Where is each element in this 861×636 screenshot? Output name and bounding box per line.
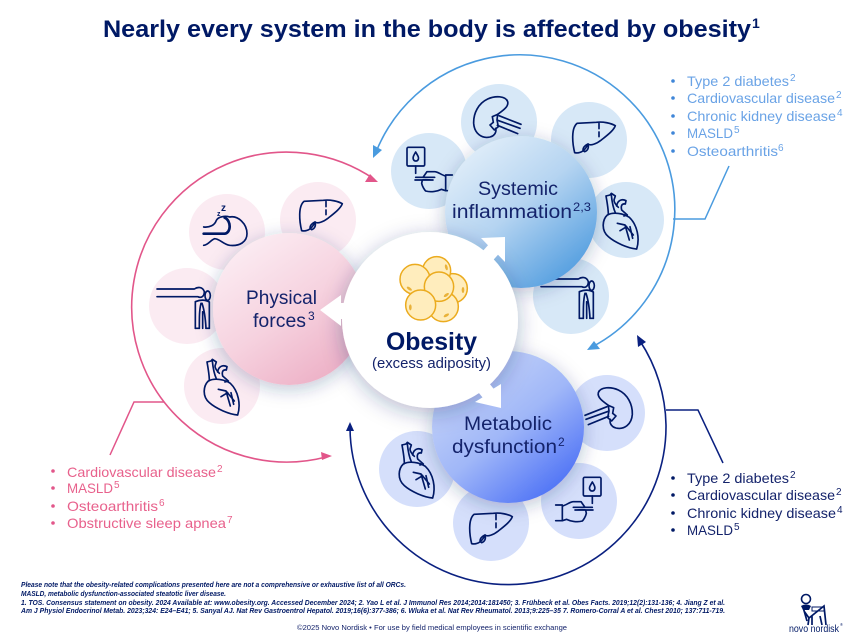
icon: blood test on blue <box>391 133 467 209</box>
label: physical forces: forces <box>253 311 306 332</box>
label: obesity: Obesity <box>386 328 477 356</box>
panel: systemic inflammation satellites <box>391 84 664 334</box>
label: systemic inflammation <box>452 179 591 223</box>
list: metabolic dysfunction complications: Cardiovascular disease <box>687 487 835 503</box>
arrow: white to physical forces <box>320 295 352 326</box>
label: metabolic dysfunction: Metabolic <box>464 414 552 435</box>
footnotes and references: 1. TOS. Consensus statement on obesity. 2024 Available at: www.obesity.org. Accessed December 2024; 2. Yao L et al. J Immunol Res 2014;2014:181450; 3. Frühbeck et al. Obes Facts. 2019;12(2):131-136; 4. Jiang Z et al. <box>21 598 725 607</box>
list: physical forces complications: 2 <box>217 464 223 475</box>
icon: liver on blue <box>551 102 627 178</box>
list: physical forces complications: Osteoarthritis <box>67 498 158 514</box>
list: metabolic dysfunction complications: 5 <box>734 522 740 533</box>
connector: navy list to arc <box>666 410 723 463</box>
connector: blue list to arc <box>673 166 729 219</box>
list: metabolic dysfunction complications: Chronic kidney disease <box>687 505 836 521</box>
title: Nearly every system in the body is affected by obesity <box>103 16 752 43</box>
icon: sleep apnea on pink <box>189 194 265 270</box>
circle: systemic inflammation <box>445 136 597 288</box>
list: metabolic dysfunction complications: Type 2 diabetes <box>687 470 789 486</box>
arrow: white to systemic inflammation <box>471 237 505 273</box>
icon: knee on blue <box>533 258 609 334</box>
list: physical forces complications: 6 <box>159 498 165 509</box>
circle: metabolic dysfunction <box>432 351 584 503</box>
list: systemic inflammation complications: 5 <box>734 125 740 136</box>
icon: fat cells <box>400 257 467 322</box>
logo: novo nordisk: novo nordisk <box>789 624 840 635</box>
circle: obesity centre <box>342 232 518 408</box>
label: systemic inflammation: inflammation <box>452 202 572 223</box>
list: metabolic dysfunction complications: 2 <box>790 470 796 481</box>
list: systemic inflammation complications: MASLD <box>687 125 733 141</box>
panel: physical forces satellites <box>149 182 356 424</box>
list: physical forces complications: 5 <box>114 480 120 491</box>
title: 1 <box>752 15 760 31</box>
list: systemic inflammation complications: Osteoarthritis <box>687 143 778 159</box>
list: systemic inflammation complications: 2 <box>836 90 842 101</box>
label: systemic inflammation: Systemic <box>478 179 558 200</box>
logo: novo nordisk: ® <box>840 622 843 627</box>
footnotes and references: Am J Physiol Endocrinol Metab. 2023;324: E24–E41; 5. Sanyal AJ. Nat Rev Gastroentrol Hepatol. 2019;16(6):377-386; 6. Wluka et al. Nat Rev Rheumatol. 2013;9:225–35 7. Romero-Corral A et al. Chest 2010; 137:711-719. <box>20 606 725 615</box>
connector: pink list to arc <box>110 402 164 455</box>
list: systemic inflammation complications: 2 <box>790 73 796 84</box>
list: systemic inflammation complications: Type 2 diabetes <box>687 73 789 89</box>
icon: liver on periwinkle <box>453 485 529 561</box>
list: systemic inflammation complications: 6 <box>778 143 784 154</box>
footnotes and references: Please note that the obesity-related complications presented here are not a comprehensive or exhaustive list of all ORCs. <box>21 580 406 589</box>
circle: physical forces <box>213 233 365 385</box>
icon: kidney on periwinkle <box>569 375 645 451</box>
panel: metabolic dysfunction satellites <box>379 375 645 561</box>
icon: heart on blue <box>588 182 664 258</box>
list: physical forces complications: 7 <box>227 515 233 526</box>
copyright line: ©2025 Novo Nordisk • For use by field medical employees in scientific exchange <box>297 623 567 632</box>
footnotes and references <box>20 580 725 615</box>
label: systemic inflammation: 2,3 <box>573 200 591 214</box>
icon: kidney on blue <box>461 84 537 160</box>
icon: sleep apnea on pink: z <box>217 211 221 218</box>
list: systemic inflammation complications: Cardiovascular disease <box>687 90 835 106</box>
list: physical forces complications: Obstructive sleep apnea <box>67 515 226 531</box>
arrow: navy arc, metabolic dysfunction cycle <box>346 335 666 585</box>
label: metabolic dysfunction <box>452 414 565 458</box>
label: obesity: (excess adiposity) <box>372 356 491 372</box>
footnotes and references: MASLD, metabolic dysfunction-associated steatotic liver disease. <box>21 589 226 598</box>
list: physical forces complications: Cardiovascular disease <box>67 464 216 480</box>
list: metabolic dysfunction complications <box>671 470 843 538</box>
list: metabolic dysfunction complications: MASLD <box>687 522 733 538</box>
list: metabolic dysfunction complications: 2 <box>836 487 842 498</box>
label: metabolic dysfunction: 2 <box>558 435 565 449</box>
list: metabolic dysfunction complications: 4 <box>837 505 843 516</box>
icon: heart on periwinkle <box>379 431 455 507</box>
label: metabolic dysfunction: dysfunction <box>452 437 557 458</box>
list: physical forces complications <box>51 464 233 531</box>
arrow: white to metabolic dysfunction <box>467 369 501 408</box>
logo: novo nordisk <box>789 594 843 635</box>
label: physical forces: 3 <box>308 309 315 323</box>
icon: sleep apnea on pink: z <box>221 203 226 214</box>
icon: blood test on periwinkle <box>541 463 617 539</box>
icon: liver on pink <box>280 182 356 258</box>
list: systemic inflammation complications: Chronic kidney disease <box>687 108 836 124</box>
arrow: blue arc, systemic inflammation cycle <box>373 55 675 350</box>
arrow: pink arc, physical forces cycle <box>132 152 378 462</box>
list: physical forces complications: MASLD <box>67 480 113 496</box>
list: systemic inflammation complications: 4 <box>837 108 843 119</box>
label: physical forces <box>246 288 317 332</box>
label: obesity <box>372 328 491 372</box>
label: physical forces: Physical <box>246 288 317 309</box>
icon: knee on pink <box>149 268 225 344</box>
icon: heart on pink <box>184 348 260 424</box>
list: systemic inflammation complications <box>671 73 843 159</box>
